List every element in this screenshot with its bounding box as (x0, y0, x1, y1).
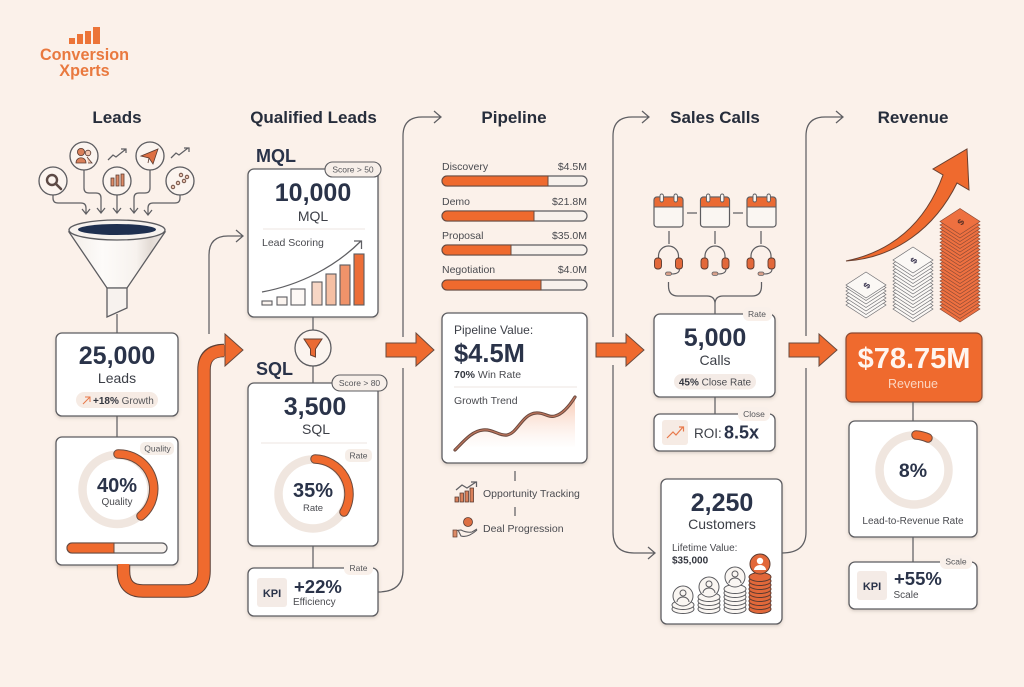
stage: discovery: Discovery (442, 161, 489, 173)
stage: proposal (442, 230, 587, 255)
icon: coin stacks (672, 554, 771, 614)
tag: rate: Rate (748, 309, 766, 319)
pill: +18% growth: +18% Growth (93, 396, 154, 407)
donut: 35%: Rate (303, 503, 323, 514)
icon: white cash stack medium (893, 247, 933, 322)
donut: 8%: 8% (899, 460, 927, 482)
icon row: headsets (654, 246, 775, 314)
card: ROI 8.5x (654, 407, 775, 451)
card: KPI +55% (849, 555, 977, 609)
donut: 40% (82, 454, 154, 524)
icon: rising arrow (846, 149, 969, 261)
card: 25,000 leads: Leads (98, 370, 136, 386)
sub-heading: MQL: MQL (256, 146, 296, 166)
card: 10,000 MQL: 10,000 (275, 179, 351, 207)
stage: negotiation: $4.0M (558, 264, 587, 276)
tag: rate: Rate (350, 450, 368, 460)
icon row: calendars (654, 194, 776, 244)
connector: calls to ROI (714, 397, 716, 414)
donut: 40%: 40% (97, 475, 137, 497)
progress bar (67, 543, 167, 553)
logo: Conversion Xperts (40, 27, 129, 80)
icon: white cash stack medium: $ (908, 256, 919, 265)
card: 8% lead-to-revenue rate (849, 421, 977, 537)
pill: 45% close rate: 45% Close Rate (679, 378, 752, 388)
icons: lead sources feeding the funnel (39, 142, 194, 215)
stage: negotiation: Negotiation (442, 264, 495, 276)
tag: scale: Scale (945, 556, 967, 566)
card: 10,000 MQL: MQL (298, 208, 328, 224)
icon: funnel (69, 220, 165, 317)
card: pipeline value: $4.5M (454, 340, 525, 368)
badge: score > 80 (332, 375, 387, 391)
card: 2,250 customers: Lifetime Value: (672, 543, 737, 554)
stage: discovery (442, 161, 587, 186)
heading: Qualified Leads: Qualified Leads (250, 108, 377, 127)
card: 2,250 customers: 2,250 (691, 489, 753, 517)
badge: score > 50: Score > 50 (332, 164, 374, 174)
connector: funnel to leads card (116, 314, 118, 437)
icon: white cash stack small (846, 272, 886, 318)
arrow: to pipeline (386, 333, 434, 366)
arrow: to revenue (789, 334, 837, 366)
icon: trend (662, 420, 688, 445)
card: ROI 8.5x: 8.5x (724, 422, 759, 442)
card: $78.75M revenue: $78.75M (858, 343, 970, 375)
card: KPI +22%: Efficiency (293, 597, 336, 608)
card: 25,000 leads: 25,000 (79, 342, 155, 370)
stage: demo: $21.8M (552, 196, 587, 208)
card: $78.75M revenue: Revenue (888, 377, 938, 391)
heading: Pipeline: Pipeline (481, 108, 547, 127)
connector: pipeline to sales calls and customers (613, 111, 655, 559)
badge: score > 80: Score > 80 (339, 378, 380, 388)
sub-heading: SQL: SQL (256, 359, 293, 379)
tag: quality: Quality (144, 444, 171, 454)
card: 5,000 calls: Calls (699, 352, 731, 368)
card: 3,500 SQL (248, 375, 387, 546)
card: 8% lead-to-revenue rate: Lead-to-Revenue Rate (862, 516, 964, 527)
panel: pipeline stage bars (442, 161, 587, 290)
card: $78.75M revenue (846, 333, 982, 402)
card: 40% quality (56, 437, 178, 565)
card: KPI +55%: +55% (894, 568, 942, 589)
stage: demo (442, 196, 587, 221)
stage: proposal: Proposal (442, 230, 483, 242)
connector: leads to MQL (209, 230, 243, 334)
stage: proposal: $35.0M (552, 230, 587, 242)
donut: 40%: Quality (101, 497, 133, 508)
card: 2,250 customers: Customers (688, 516, 756, 532)
stage: demo: Demo (442, 196, 470, 208)
card: KPI +55%: Scale (894, 590, 919, 601)
card: 5,000 calls: 5,000 (684, 324, 746, 352)
connector: rate to KPI (912, 537, 914, 562)
item: opportunity tracking: Opportunity Tracking (483, 488, 580, 500)
card: pipeline value: Growth Trend (454, 395, 518, 407)
card: KPI +22% (248, 561, 378, 616)
arrow: thick orange path from quality to qualified leads (124, 334, 243, 591)
heading: Sales Calls: Sales Calls (670, 108, 760, 127)
card: pipeline value: 70% Win Rate (454, 369, 521, 381)
connector: MQL to SQL (312, 317, 314, 383)
item: deal progression: Deal Progression (483, 523, 564, 535)
KPI box: KPI (863, 581, 881, 593)
card: KPI +22%: +22% (294, 576, 342, 597)
card: 3,500 SQL: SQL (302, 421, 330, 437)
connector: KPI to pipeline (378, 111, 441, 592)
heading: Leads: Leads (92, 108, 142, 127)
stage: discovery: $4.5M (558, 161, 587, 173)
chart: lead scoring bars (262, 241, 364, 305)
icon: filter (295, 330, 331, 366)
connector: customers to revenue (782, 111, 843, 553)
icon: orange cash stack tall (940, 208, 980, 322)
card: pipeline value: Pipeline Value: (454, 323, 533, 337)
card: 25,000 leads (56, 333, 178, 416)
card: 2,250 customers (661, 479, 782, 624)
item: opportunity tracking (455, 482, 580, 502)
icon: white cash stack small: $ (861, 281, 872, 290)
donut: 35%: 35% (293, 480, 333, 502)
donut: 35% (278, 459, 349, 528)
card: 2,250 customers: $35,000 (672, 556, 709, 566)
icon: orange cash stack tall: $ (955, 217, 966, 227)
connector: SQL to KPI (312, 546, 314, 568)
tag: rate (345, 449, 372, 462)
card: pipeline value (442, 313, 587, 463)
arrow: to sales calls (596, 334, 644, 366)
item: deal progression (453, 518, 564, 537)
tag: close: Close (743, 409, 765, 419)
card: 5,000 calls (654, 307, 775, 397)
card: ROI 8.5x: ROI: (694, 426, 722, 441)
logo: Conversion Xperts: Xperts (59, 62, 110, 80)
card: 10,000 MQL (248, 162, 381, 317)
card: 3,500 SQL: 3,500 (284, 393, 346, 421)
chart: growth trend (455, 397, 575, 450)
logo: Conversion Xperts: Conversion (40, 46, 129, 64)
tag: rate: Rate (350, 563, 368, 573)
KPI box: KPI (263, 588, 281, 600)
connector: revenue to rate (912, 402, 914, 421)
stage: negotiation (442, 264, 587, 290)
connector: pipeline to tracking items (514, 471, 516, 516)
badge: score > 50 (325, 162, 381, 177)
heading: Revenue: Revenue (878, 108, 948, 127)
card: 10,000 MQL: Lead Scoring (262, 237, 324, 249)
